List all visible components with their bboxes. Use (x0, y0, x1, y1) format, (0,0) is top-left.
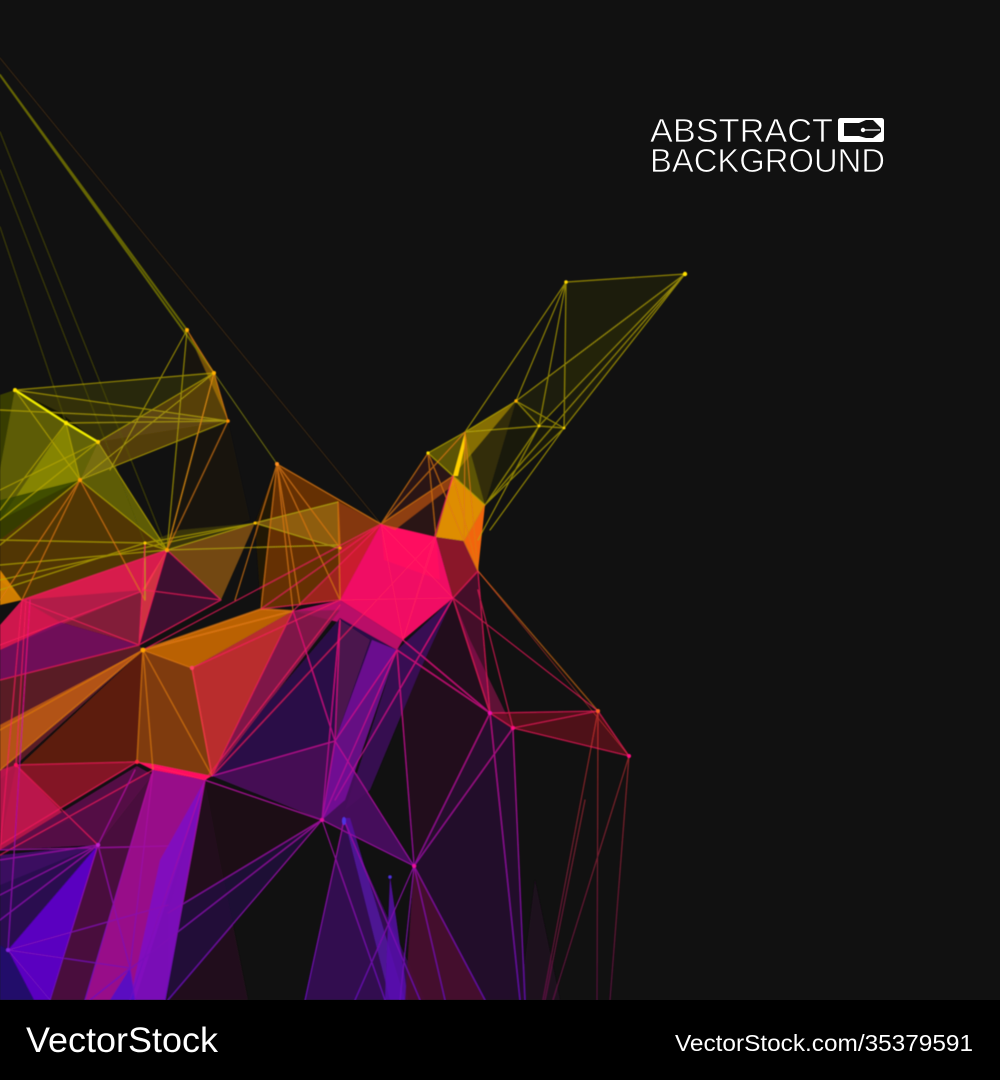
mesh fills: gold cluster upper right (428, 274, 685, 571)
title: abstract background logo (650, 112, 885, 179)
icon: pen nib badge (838, 118, 884, 142)
title line: ABSTRACT: ABSTRACT (650, 112, 833, 149)
footer brand: VectorStock (26, 1021, 219, 1060)
mesh lines: orange (0, 330, 598, 776)
mesh fills: dark magenta right (345, 571, 629, 1000)
abstract polygon mesh (0, 58, 687, 1000)
mesh fills: pink band left (0, 523, 255, 780)
mesh lines: bright yellow edge (15, 390, 98, 442)
title line: BACKGROUND: BACKGROUND (650, 142, 885, 179)
footer image id: VectorStock.com/35379591 (675, 1030, 973, 1056)
mesh fills: orange and red lower left (0, 609, 340, 850)
mesh fills: violet lower centre (165, 618, 485, 1000)
mesh lines: olive strands top left (0, 58, 381, 550)
mesh lines: faded red right edge (478, 571, 629, 1000)
mesh fills: purple lower left (0, 770, 205, 1000)
mesh nodes (6, 272, 687, 952)
mesh fills: yellow and olive upper left (0, 330, 250, 605)
mesh lines: yellow (0, 274, 685, 600)
mesh lines: magenta and violet (0, 598, 525, 1000)
mesh lines: pink and red (0, 476, 629, 855)
footer bar (0, 1000, 1000, 1080)
mesh fills: orange peak centre (255, 453, 478, 650)
